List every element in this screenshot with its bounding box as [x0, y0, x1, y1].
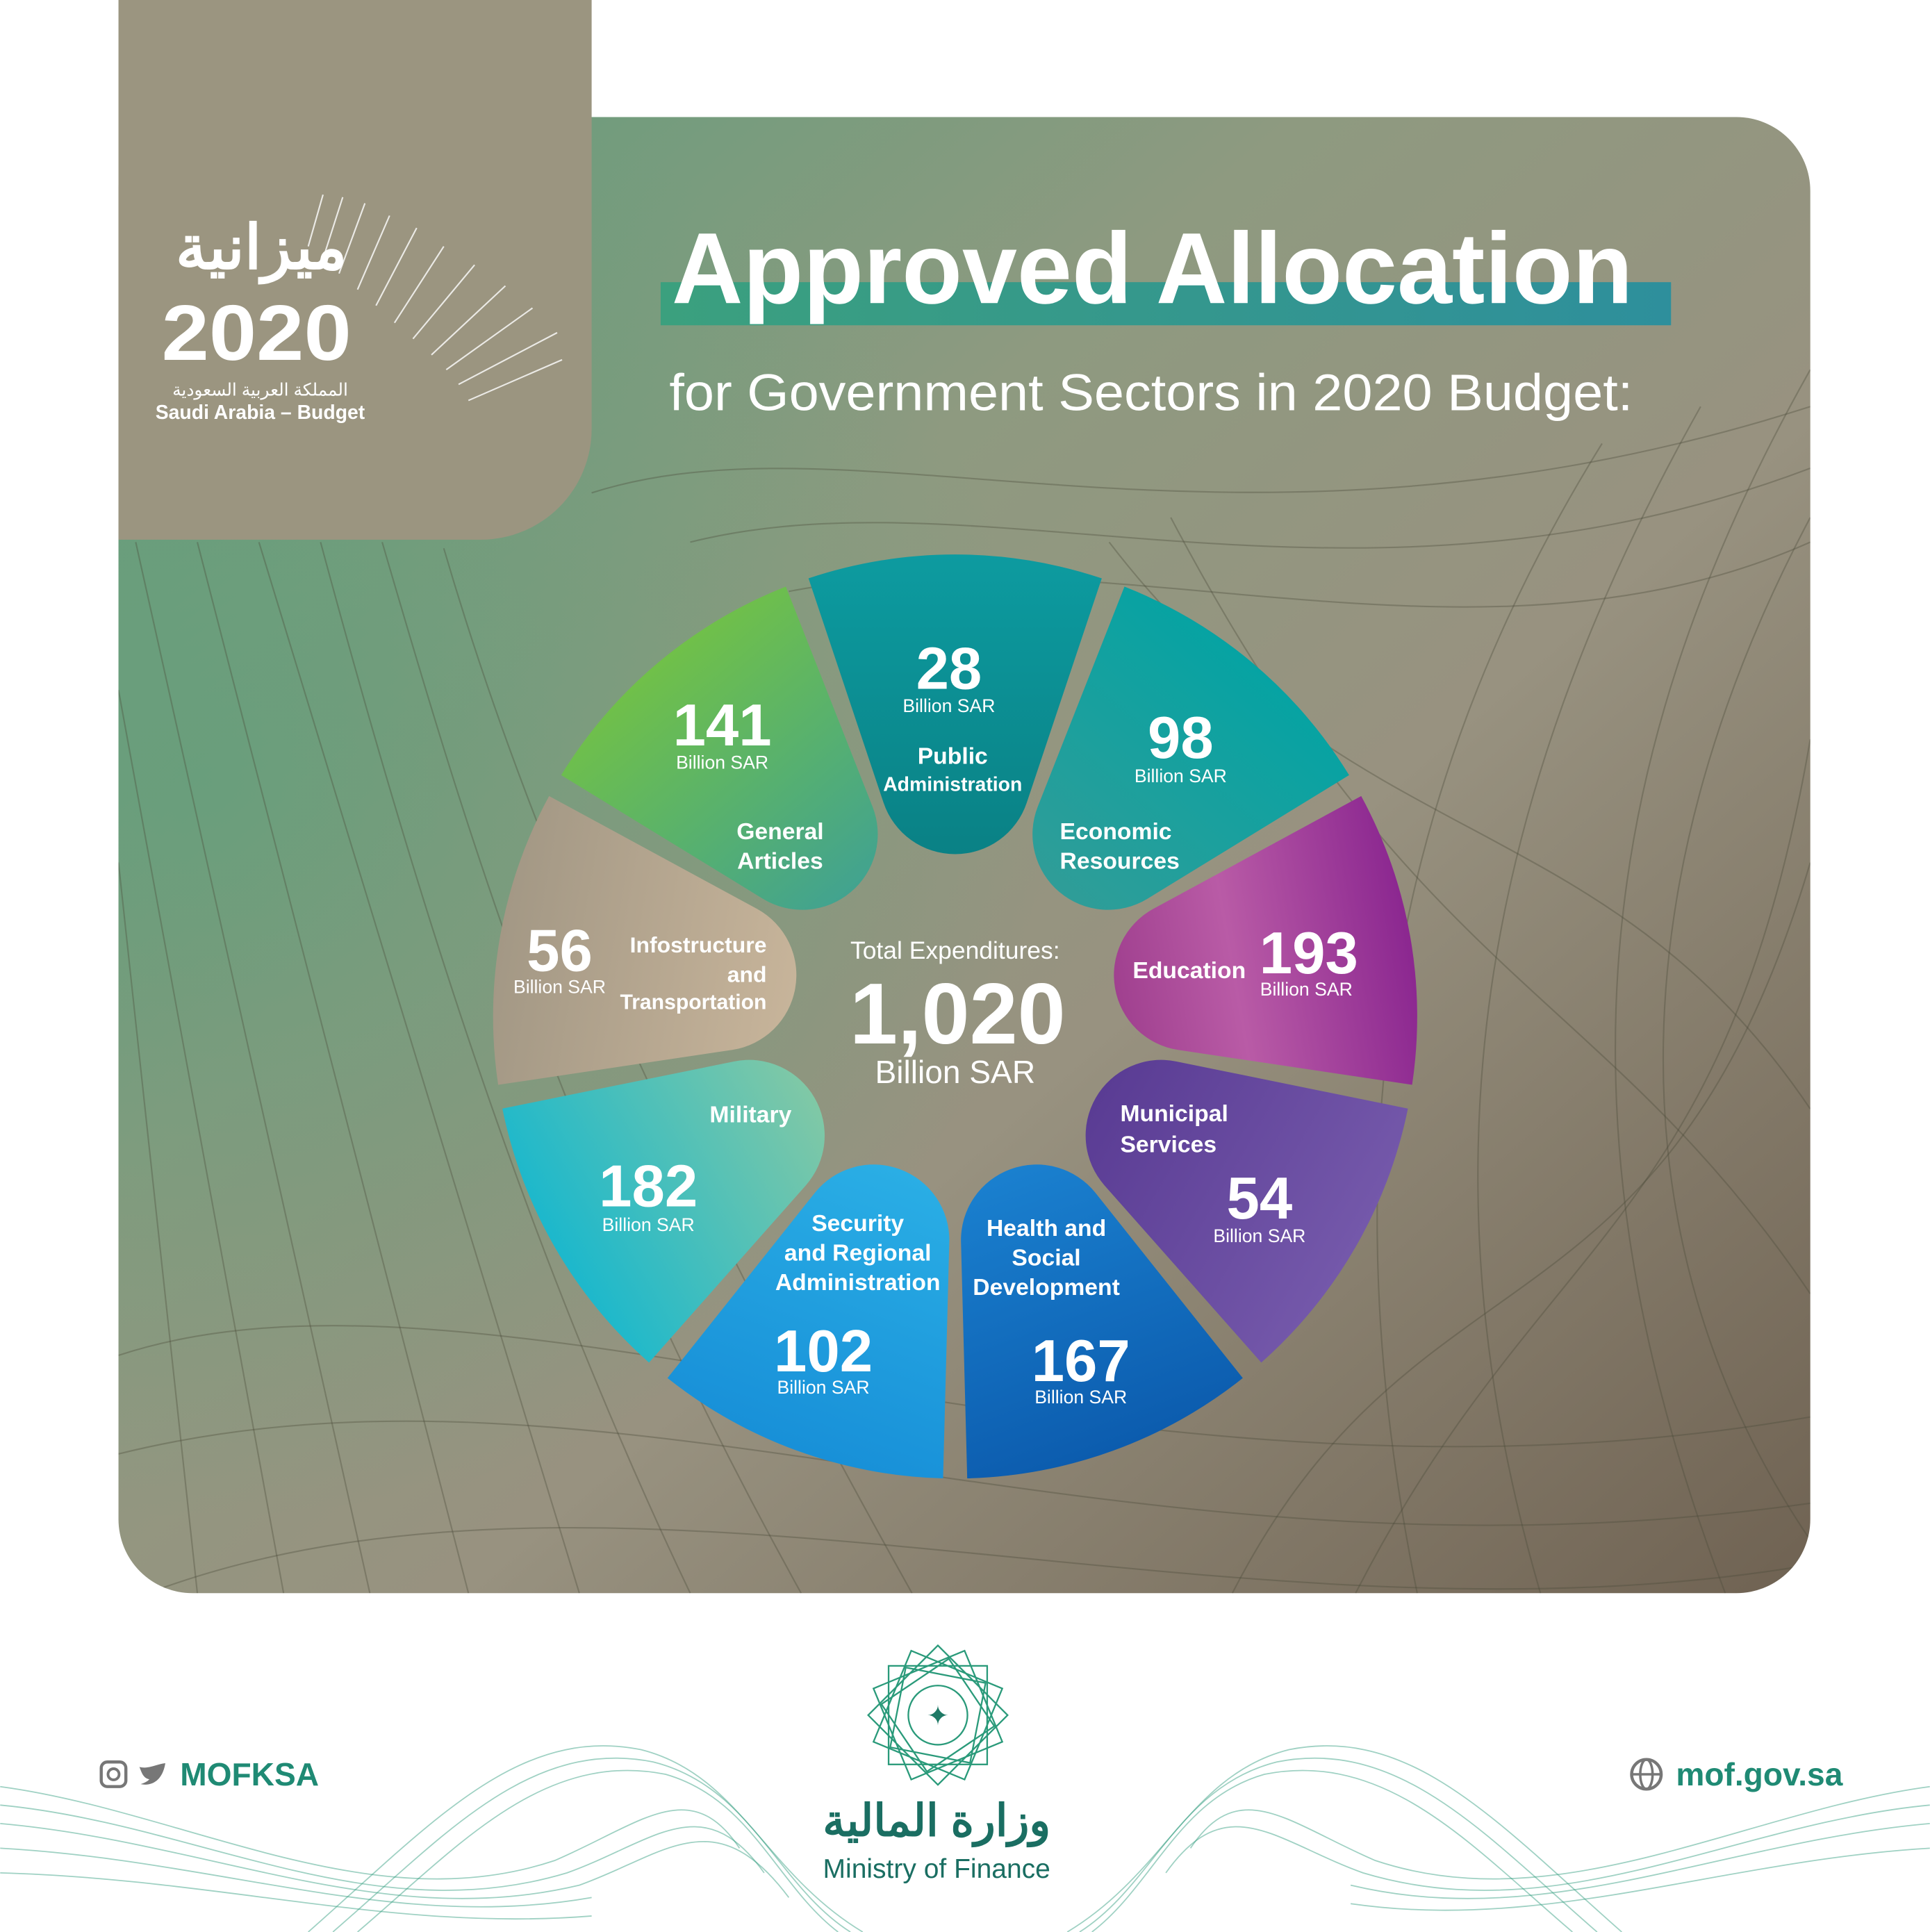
petal: infrastructure and transportation: Transportation: [620, 991, 766, 1014]
petal: security and regional administration: Security: [811, 1211, 904, 1237]
petal: public administration: Billion SAR: [902, 695, 995, 716]
petal: military: 182: [599, 1153, 698, 1219]
logo box: 2020: [162, 289, 352, 377]
petal: health and social development: Billion SAR: [1034, 1387, 1127, 1407]
petal: military: Billion SAR: [602, 1214, 695, 1235]
title: Approved Allocation: [672, 211, 1633, 324]
petal: general articles: General: [736, 819, 824, 845]
center total: [850, 936, 1066, 1090]
logo box: المملكة العربية السعودية: [172, 381, 348, 400]
petal: general articles: Billion SAR: [676, 752, 768, 773]
petal: security and regional administration: [659, 1119, 1037, 1501]
petal: public administration: Administration: [883, 774, 1022, 796]
petal: education: Education: [1132, 958, 1246, 984]
petal: security and regional administration: and Regional: [784, 1240, 931, 1266]
petal: municipal services: 54: [1227, 1166, 1292, 1232]
website: mof.gov.sa: [1676, 1756, 1843, 1792]
petal: health and social development: [873, 1119, 1251, 1501]
petal: public administration: [809, 554, 1102, 854]
petal: health and social development: Social: [1012, 1245, 1081, 1271]
petal: municipal services: Municipal: [1120, 1101, 1228, 1127]
petal: municipal services: [1023, 971, 1428, 1375]
petal: infrastructure and transportation: 56: [527, 918, 593, 984]
social handle: [101, 1756, 319, 1792]
petal: economic resources: 98: [1148, 705, 1214, 771]
footer waves: [0, 1746, 1930, 1932]
petal: education: [1089, 792, 1435, 1132]
petal: infrastructure and transportation: [475, 792, 820, 1132]
petal: public administration: 28: [916, 636, 982, 702]
petal: security and regional administration: 102: [774, 1319, 873, 1385]
petal: general articles: 141: [673, 693, 772, 759]
petal: public administration: Public: [918, 744, 988, 770]
petal: military: Military: [709, 1103, 792, 1128]
main panel: [119, 117, 1811, 1593]
petal: infrastructure and transportation: Billion SAR: [513, 977, 606, 998]
ministry logo: Ministry of Finance: [823, 1854, 1050, 1884]
petal: economic resources: Billion SAR: [1135, 766, 1227, 786]
petal: security and regional administration: Billion SAR: [777, 1377, 870, 1398]
logo box: ميزانية: [176, 213, 347, 286]
petal: economic resources: [947, 568, 1364, 986]
center total: 1,020: [850, 966, 1066, 1062]
ministry logo: ✦: [927, 1701, 949, 1731]
center total: Billion SAR: [875, 1054, 1035, 1090]
petal: municipal services: Services: [1120, 1132, 1216, 1157]
ministry logo: [823, 1646, 1050, 1884]
petal: municipal services: Billion SAR: [1213, 1225, 1305, 1246]
petal: general articles: Articles: [737, 848, 823, 874]
petal: military: [481, 971, 888, 1375]
pie chart: [475, 554, 1435, 1501]
center total: Total Expenditures:: [850, 936, 1060, 964]
petal: infrastructure and transportation: Infostructure: [630, 932, 766, 957]
petal: education: Billion SAR: [1260, 979, 1353, 1000]
logo box: [119, 0, 592, 540]
petal: general articles: [546, 568, 963, 986]
petal: health and social development: Health and: [987, 1216, 1106, 1241]
social handle: MOFKSA: [180, 1756, 319, 1792]
logo box: Saudi Arabia – Budget: [156, 402, 365, 424]
ministry logo: وزارة المالية: [823, 1796, 1050, 1848]
petal: infrastructure and transportation: and: [727, 962, 766, 987]
petal: health and social development: Development: [973, 1275, 1120, 1301]
subtitle: for Government Sectors in 2020 Budget:: [669, 364, 1633, 422]
petal: security and regional administration: Administration: [775, 1270, 941, 1296]
petal: health and social development: 167: [1032, 1328, 1130, 1394]
petal: education: 193: [1260, 920, 1358, 986]
petal: economic resources: Economic: [1060, 819, 1172, 845]
petal: economic resources: Resources: [1060, 848, 1180, 874]
